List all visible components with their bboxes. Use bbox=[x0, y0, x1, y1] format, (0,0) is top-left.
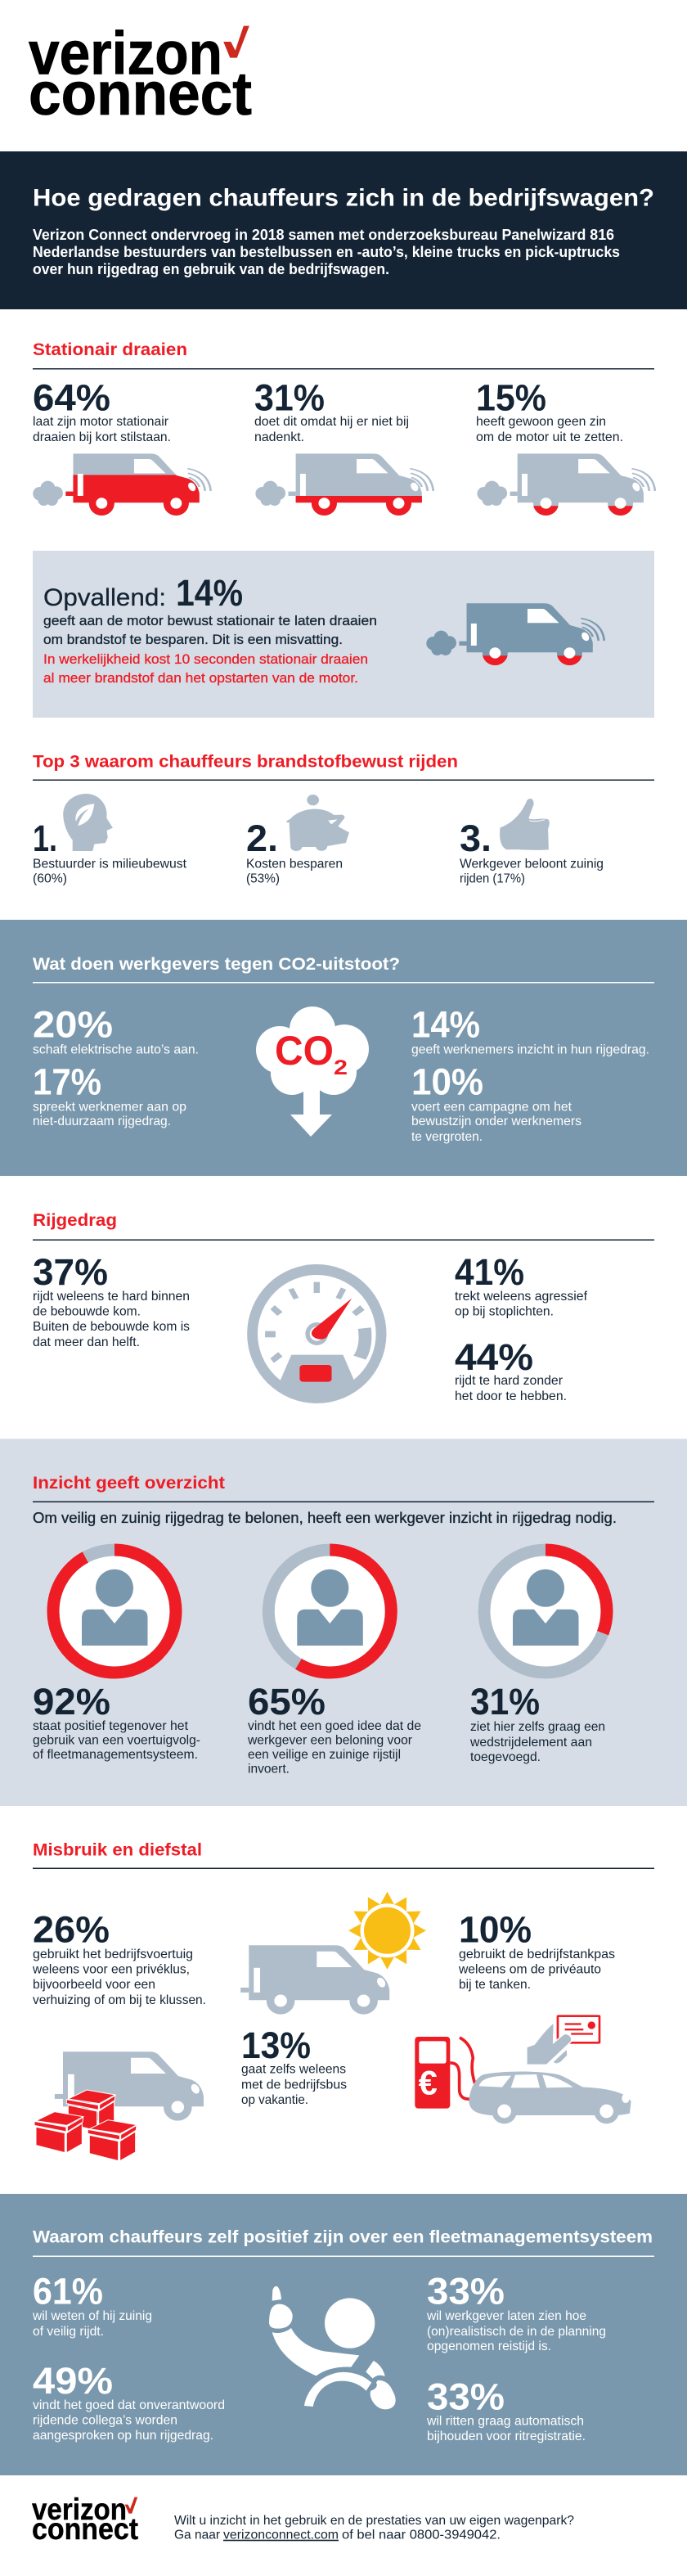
stat 17%: niet-duurzaam rijgedrag. bbox=[33, 1115, 171, 1128]
stat 10% bbox=[458, 1908, 615, 1992]
callout: Opvallend 14% bbox=[33, 551, 654, 718]
stat 65%: een veilige en zuinige rijstijl bbox=[248, 1748, 401, 1762]
icon: van with moving boxes bbox=[34, 2051, 204, 2161]
panel: Top 3 bbox=[33, 752, 654, 885]
stat 49%: vindt het goed dat onverantwoord bbox=[33, 2398, 225, 2412]
stat 10%: te vergroten. bbox=[411, 1130, 483, 1144]
stat 33% planning: opgenomen reistijd is. bbox=[427, 2340, 551, 2353]
stat 92%: gebruik van een voertuigvolg- bbox=[33, 1734, 200, 1748]
icon: van with sun bbox=[240, 1892, 426, 2015]
icon: person bbox=[82, 1569, 147, 1646]
callout headline bbox=[43, 572, 243, 614]
icon: fuel pump, car and fuel card bbox=[415, 2015, 631, 2123]
logo: Verizon Connect small bbox=[32, 2493, 138, 2546]
intro text bbox=[33, 227, 620, 277]
callout text bbox=[43, 613, 377, 686]
icon: fuel pump bbox=[415, 2037, 475, 2109]
reason 1: 1. bbox=[33, 817, 57, 859]
stat 10%: 10% bbox=[459, 1908, 532, 1950]
stat 65%: invoert. bbox=[248, 1763, 290, 1777]
heading: Inzicht geeft overzicht bbox=[33, 1473, 225, 1493]
stat 13%: met de bedrijfsbus bbox=[241, 2078, 347, 2092]
stat 15%: 15% bbox=[476, 377, 546, 419]
icon: person bbox=[513, 1569, 579, 1646]
stat 33% planning: 33% bbox=[427, 2271, 505, 2313]
panel: Rijgedrag bbox=[33, 1210, 654, 1403]
stat 31%: 31% bbox=[470, 1681, 540, 1723]
stat 31%: doet dit omdat hij er niet bij bbox=[254, 415, 409, 429]
stat 15%: heeft gewoon geen zin bbox=[476, 415, 606, 429]
logo: Verizon Connect: verizon bbox=[29, 20, 222, 88]
stat 10%: bewustzijn onder werknemers bbox=[411, 1115, 581, 1128]
donut 65% bbox=[263, 1543, 397, 1679]
stat 61%: of veilig rijdt. bbox=[33, 2325, 104, 2339]
icon: piggy bank bbox=[286, 795, 349, 851]
reason 1 bbox=[33, 794, 187, 885]
panel: Stationair draaien bbox=[33, 340, 655, 516]
intro sentence: Om veilig en zuinig rijgedrag te belonen, heeft een werkgever inzicht in rijgedrag nodig. bbox=[33, 1510, 617, 1526]
stat 31% bbox=[469, 1681, 605, 1764]
icon: fuel pump: € bbox=[419, 2063, 438, 2101]
stat 41%: op bij stoplichten. bbox=[455, 1304, 554, 1318]
stat 61% bbox=[32, 2271, 152, 2339]
heading: Waarom chauffeurs zelf positief zijn over een fleetmanagementsysteem bbox=[33, 2227, 653, 2247]
donut 92% bbox=[47, 1543, 182, 1679]
stat 17%: 17% bbox=[33, 1061, 101, 1103]
stat 61%: 61% bbox=[33, 2271, 103, 2313]
title: Hoe gedragen chauffeurs zich in de bedrijfswagen? bbox=[33, 185, 654, 212]
stat 10%: voert een campagne om het bbox=[411, 1100, 572, 1114]
stat 49%: rijdende collega’s worden bbox=[33, 2413, 177, 2427]
call to action: Wilt u inzicht in het gebruik en de prestaties van uw eigen wagenpark? bbox=[174, 2514, 574, 2528]
stat 64%: laat zijn motor stationair bbox=[33, 415, 169, 429]
icon: thumbs up bbox=[500, 799, 550, 850]
stat 37%: Buiten de bebouwde kom is bbox=[33, 1320, 190, 1334]
stat 41%: 41% bbox=[455, 1251, 524, 1293]
icon: CO2 cloud with arrow: CO bbox=[275, 1028, 334, 1074]
stat 92% bbox=[33, 1681, 200, 1762]
stat 33% planning: (on)realistisch de in de planning bbox=[427, 2325, 606, 2339]
stat 49%: aangesproken op hun rijgedrag. bbox=[33, 2429, 213, 2443]
stat 31%: toegevoegd. bbox=[470, 1750, 541, 1764]
stat 13%: 13% bbox=[241, 2024, 311, 2066]
reason 3: 3. bbox=[460, 817, 492, 859]
stat 44%: 44% bbox=[455, 1336, 533, 1378]
stat 41%: trekt weleens agressief bbox=[455, 1290, 588, 1304]
stat 65% bbox=[247, 1681, 421, 1777]
stat 65%: 65% bbox=[248, 1681, 326, 1723]
stat 26%: weleens voor een privéklus, bbox=[32, 1963, 190, 1977]
panel: CO2 bbox=[0, 920, 687, 1176]
stat 64% bbox=[33, 377, 171, 444]
heading: Misbruik en diefstal bbox=[33, 1840, 202, 1860]
stat 13%: op vakantie. bbox=[241, 2093, 308, 2107]
reason 3 bbox=[460, 799, 604, 885]
stat 10%: bij te tanken. bbox=[459, 1978, 531, 1992]
stat 15% bbox=[476, 377, 623, 444]
stat 20%: 20% bbox=[33, 1004, 113, 1046]
reason 2: 2. bbox=[246, 817, 278, 859]
heading: Stationair draaien bbox=[33, 340, 187, 359]
stat 20%: schaft elektrische auto’s aan. bbox=[33, 1043, 199, 1056]
heading: Wat doen werkgevers tegen CO2-uitstoot? bbox=[33, 954, 400, 974]
stat 31%: wedstrijdelement aan bbox=[469, 1736, 592, 1750]
stat 26% bbox=[32, 1908, 206, 2007]
stat 33% planning bbox=[426, 2271, 606, 2353]
stat 31%: ziet hier zelfs graag een bbox=[470, 1720, 605, 1734]
stat 17% bbox=[33, 1061, 186, 1128]
stat 33% ritregistratie: bijhouden voor ritregistratie. bbox=[427, 2430, 586, 2443]
icon: CO2 cloud with arrow bbox=[256, 1007, 369, 1137]
stat 31% bbox=[254, 377, 409, 444]
stat 44% bbox=[455, 1336, 567, 1403]
icon: van 2, red floor bbox=[255, 453, 433, 516]
stat 49%: 49% bbox=[33, 2360, 113, 2402]
icon: speedometer bbox=[247, 1264, 386, 1403]
stat 64%: draaien bij kort stilstaan. bbox=[33, 430, 171, 444]
stat 26%: gebruikt het bedrijfsvoertuig bbox=[33, 1948, 193, 1961]
icon: person bbox=[297, 1569, 363, 1646]
heading: Rijgedrag bbox=[33, 1210, 117, 1230]
icon: driver with thumb up bbox=[269, 2286, 396, 2409]
logo: Verizon Connect: connect bbox=[29, 60, 252, 128]
stat 37%: de bebouwde kom. bbox=[33, 1304, 141, 1318]
stat 37%: 37% bbox=[33, 1251, 108, 1293]
reason 1: Bestuurder is milieubewust bbox=[33, 858, 187, 871]
stat 31%: 31% bbox=[254, 377, 325, 419]
stat 14%: 14% bbox=[411, 1004, 480, 1046]
reason 3: rijden (17%) bbox=[460, 871, 525, 885]
logo: Verizon Connect small: connect bbox=[32, 2512, 138, 2546]
footer bbox=[32, 2493, 574, 2546]
donut 31% bbox=[478, 1543, 613, 1679]
stat 10% bbox=[411, 1061, 581, 1144]
stat 14%: geeft werknemers inzicht in hun rijgedrag. bbox=[411, 1043, 649, 1056]
stat 37%: dat meer dan helft. bbox=[33, 1335, 140, 1349]
icon: fuel card in hand bbox=[527, 2015, 600, 2065]
stat 65%: werkgever een beloning voor bbox=[247, 1734, 413, 1748]
stat 33% ritregistratie bbox=[426, 2376, 586, 2443]
heading: Top 3 waarom chauffeurs brandstofbewust rijden bbox=[33, 752, 458, 772]
reason 2 bbox=[246, 795, 349, 885]
stat 92%: 92% bbox=[33, 1681, 110, 1723]
callout headline: 14% bbox=[176, 572, 243, 614]
stat 33% planning: wil werkgever laten zien hoe bbox=[426, 2309, 586, 2323]
stat 33% ritregistratie: 33% bbox=[427, 2376, 505, 2417]
call to action: Ga naar bbox=[174, 2529, 221, 2542]
logo: Verizon Connect bbox=[29, 20, 252, 128]
stat 44%: rijdt te hard zonder bbox=[455, 1374, 564, 1388]
reason 3: Werkgever beloont zuinig bbox=[460, 858, 604, 871]
panel: Inzicht geeft overzicht bbox=[0, 1439, 687, 1806]
call to action bbox=[174, 2514, 574, 2542]
stat 44%: het door te hebben. bbox=[455, 1389, 567, 1403]
intro text: Nederlandse bestuurders van bestelbussen en -auto’s, kleine trucks en pick-uptrucks bbox=[33, 244, 620, 260]
stat 20% bbox=[33, 1004, 199, 1056]
panel: Waarom chauffeurs zelf positief bbox=[0, 2194, 687, 2475]
call to action: of bel naar 0800-3949042. bbox=[342, 2529, 501, 2542]
panel: Misbruik en diefstal bbox=[32, 1840, 654, 2161]
icon: car bbox=[469, 2071, 631, 2123]
icon: head with leaf bbox=[63, 794, 113, 851]
stat 13%: gaat zelfs weleens bbox=[241, 2062, 346, 2076]
stat 41% bbox=[455, 1251, 588, 1318]
stat 37% bbox=[33, 1251, 190, 1349]
stat 49% bbox=[33, 2360, 225, 2443]
stat 13% bbox=[241, 2024, 347, 2107]
stat 65%: vindt het een goed idee dat de bbox=[248, 1719, 421, 1733]
icon: CO2 cloud with arrow: 2 bbox=[334, 1056, 348, 1079]
callout text: om brandstof te besparen. Dit is een misvatting. bbox=[43, 632, 343, 647]
reason 2: (53%) bbox=[246, 871, 280, 885]
callout text: al meer brandstof dan het opstarten van de motor. bbox=[43, 670, 358, 686]
stat 64%: 64% bbox=[33, 377, 110, 419]
icon: van 3, red wheels bbox=[477, 453, 655, 516]
intro text: Verizon Connect ondervroeg in 2018 samen met onderzoeksbureau Panelwizard 816 bbox=[33, 227, 614, 243]
icon: van 1, mostly red bbox=[33, 453, 211, 516]
stat 26%: verhuizing of om bij te klussen. bbox=[33, 1993, 206, 2007]
stat 92%: staat positief tegenover het bbox=[33, 1719, 189, 1733]
call to action: verizonconnect.com bbox=[223, 2529, 339, 2542]
callout text: In werkelijkheid kost 10 seconden stationair draaien bbox=[43, 651, 368, 667]
stat 37%: rijdt weleens te hard binnen bbox=[33, 1290, 190, 1304]
stat 10%: gebruikt de bedrijfstankpas bbox=[459, 1948, 615, 1961]
stat 61%: wil weten of hij zuinig bbox=[32, 2309, 152, 2323]
logo: Verizon Connect small: verizon bbox=[32, 2493, 127, 2526]
intro text: over hun rijgedrag en gebruik van de bedrijfswagen. bbox=[33, 261, 389, 277]
stat 10%: 10% bbox=[411, 1061, 483, 1103]
stat 26%: 26% bbox=[33, 1908, 110, 1950]
header banner bbox=[0, 151, 687, 309]
reason 2: Kosten besparen bbox=[246, 858, 343, 871]
stat 26%: bijvoorbeeld voor een bbox=[33, 1978, 155, 1992]
reason 1: (60%) bbox=[33, 871, 67, 885]
callout headline: Opvallend: bbox=[43, 584, 166, 611]
icon: van 4, blue with red wheels bbox=[426, 603, 604, 665]
stat 33% ritregistratie: wil ritten graag automatisch bbox=[426, 2414, 584, 2428]
stat 17%: spreekt werknemer aan op bbox=[33, 1100, 186, 1114]
stat 10%: weleens om de privéauto bbox=[458, 1963, 601, 1977]
stat 92%: of fleetmanagementsysteem. bbox=[33, 1748, 198, 1762]
callout text: geeft aan de motor bewust stationair te laten draaien bbox=[43, 613, 377, 628]
stat 14% bbox=[411, 1004, 649, 1056]
stat 31%: nadenkt. bbox=[254, 430, 304, 444]
stat 15%: om de motor uit te zetten. bbox=[476, 430, 623, 444]
